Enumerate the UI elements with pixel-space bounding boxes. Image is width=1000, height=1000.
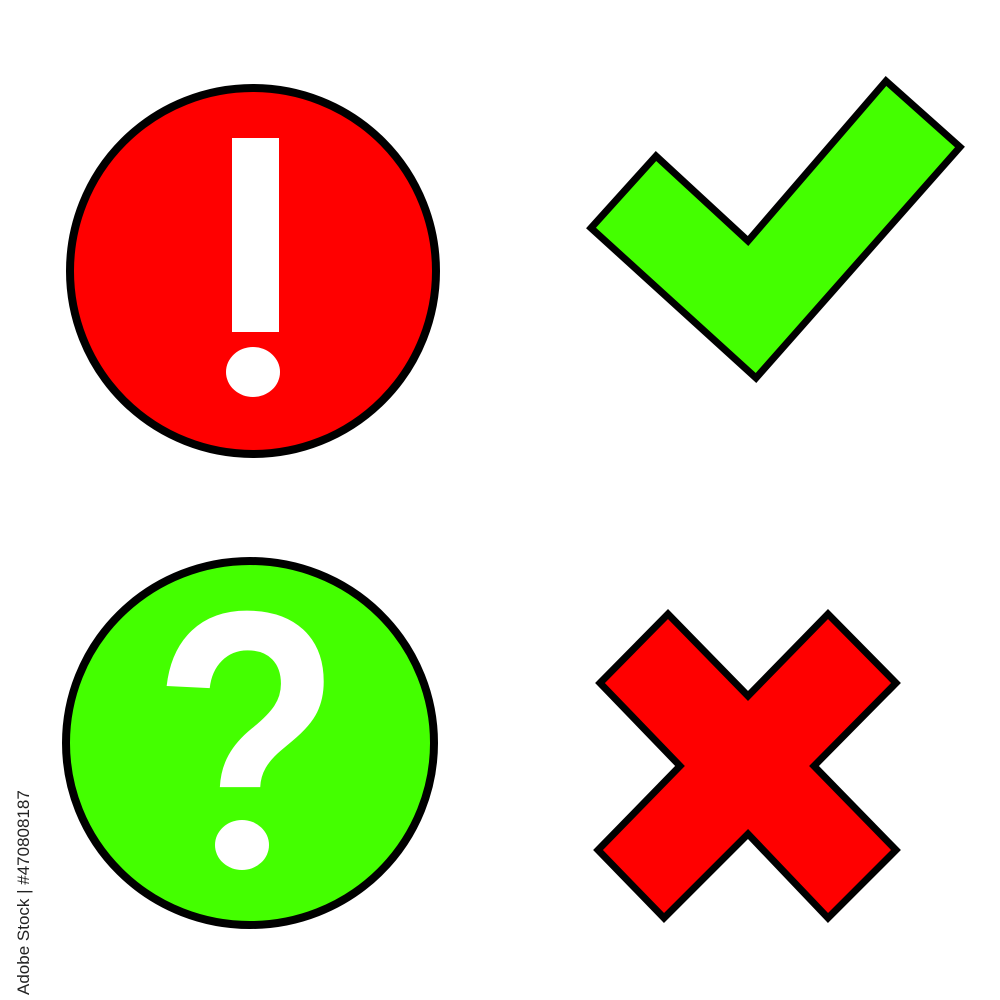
- icon: red exclamation circle: [70, 88, 436, 454]
- icon: green question circle: [66, 537, 434, 939]
- icon: green check mark: [591, 81, 960, 378]
- icon: green question circle: ?: [152, 537, 342, 939]
- icon: red X cross: [598, 614, 896, 918]
- watermark id text: Adobe Stock | #470808187: [14, 790, 33, 995]
